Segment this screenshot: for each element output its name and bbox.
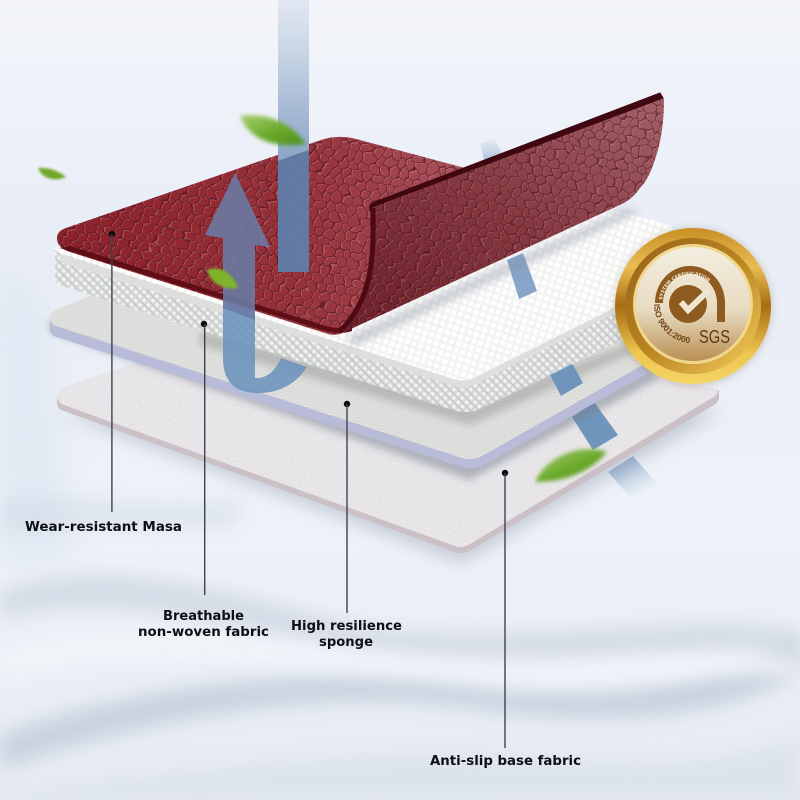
air flow up arrow head and shaft on leather bbox=[205, 173, 270, 320]
layer: wear-resistant leather, flat part bbox=[57, 136, 638, 348]
layer: breathable non-woven fabric bbox=[55, 200, 672, 412]
callout: anti-slip base fabric bbox=[430, 470, 581, 769]
layer: high resilience sponge bbox=[50, 280, 660, 480]
badge text: iso: ISO 9001:2000 bbox=[654, 304, 690, 343]
callout: breathable non-woven fabric bbox=[138, 321, 269, 640]
callout: wear-resistant masa: Wear-resistant Masa bbox=[25, 520, 182, 535]
diagonal air flow bar on sponge bbox=[550, 363, 583, 396]
leaf: lower right bbox=[535, 449, 607, 482]
layer: anti-slip base fabric bbox=[57, 355, 722, 562]
badge text: sgs: SGS bbox=[699, 327, 730, 347]
leaf: left small bbox=[38, 168, 66, 179]
callout: high resilience sponge: sponge bbox=[319, 635, 373, 650]
leaf: top bbox=[240, 115, 306, 145]
diagonal air flow bar on base fabric bbox=[572, 402, 618, 450]
up arrow: lower part on fabric bbox=[223, 290, 307, 393]
callout: breathable non-woven fabric: non-woven fabric bbox=[138, 625, 269, 640]
certification badge bbox=[610, 224, 776, 390]
badge text: system certification: SYSTEM CERTIFICATION bbox=[659, 272, 710, 300]
callout: anti-slip base fabric: Anti-slip base fabric bbox=[430, 754, 581, 769]
air flow down bar bbox=[278, 0, 309, 272]
diagonal air flow bar below base fabric bbox=[608, 456, 658, 497]
callout: high resilience sponge bbox=[291, 401, 402, 650]
badge check mark bbox=[681, 290, 709, 310]
badge check circle bbox=[669, 285, 707, 323]
callout: breathable non-woven fabric: Breathable bbox=[163, 609, 244, 624]
badge logo arch bbox=[655, 266, 725, 322]
diagonal air flow bar on fabric bbox=[507, 253, 537, 299]
diagonal air flow bar behind flap bbox=[480, 139, 505, 168]
leaf: middle bbox=[207, 268, 238, 288]
leather flap folded over bbox=[338, 92, 664, 334]
callout: high resilience sponge: High resilience bbox=[291, 619, 402, 634]
callout: wear-resistant masa bbox=[25, 231, 182, 535]
